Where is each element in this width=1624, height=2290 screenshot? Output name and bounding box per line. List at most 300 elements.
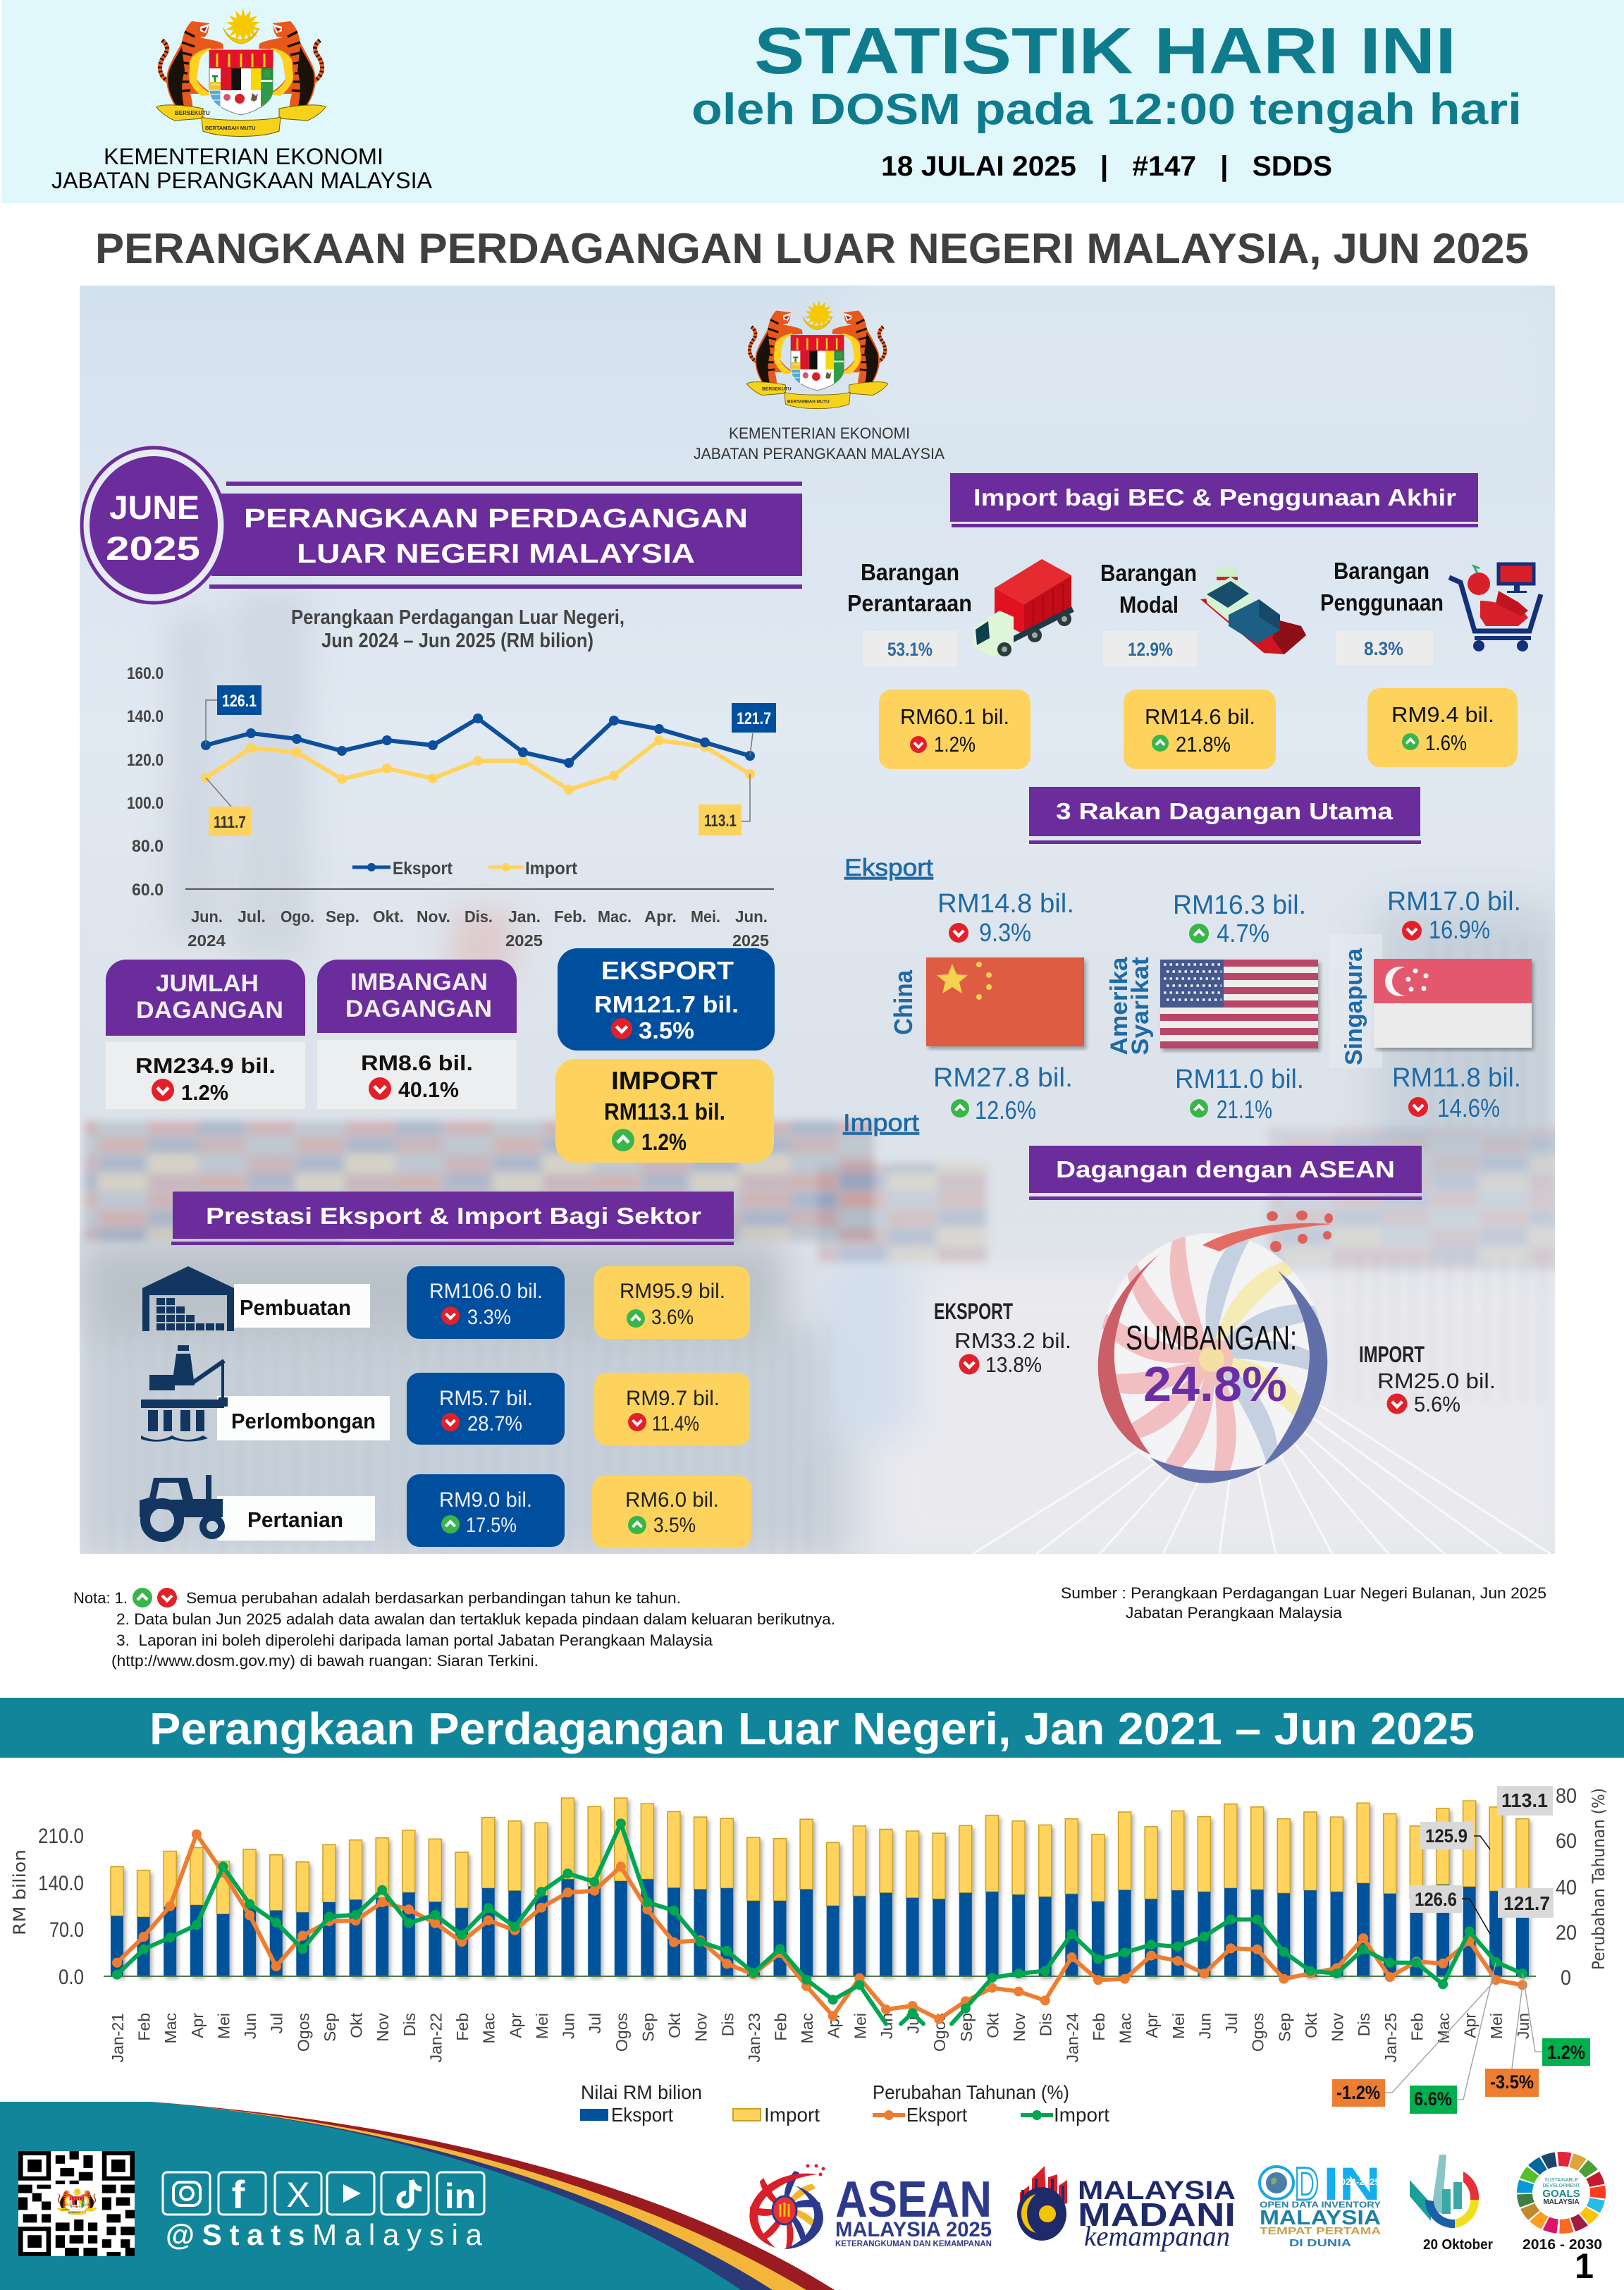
icon: tractor (140, 1475, 223, 1537)
x axis labels: Jan. (508, 907, 541, 926)
date line: 18 JULAI 2025 | #147 | SDDS (881, 151, 1332, 182)
panel: Imbangan Dagangan: 40.1% (398, 1077, 459, 1102)
legend: Import (1054, 2104, 1109, 2126)
y axis labels: 120.0 (127, 751, 164, 770)
x axis months: Jul (586, 2013, 604, 2033)
x axis months: Mac (480, 2013, 498, 2043)
USA flag (1160, 960, 1318, 1048)
share (1103, 631, 1198, 666)
USA import: 21.1% (1217, 1095, 1272, 1124)
emblem letters: IN (1323, 2157, 1381, 2210)
panel: Jumlah Dagangan (106, 960, 305, 1109)
page number: 1 (1575, 2246, 1594, 2286)
label (234, 1284, 370, 1328)
x axis months: Jul (268, 2013, 286, 2033)
China export: RM14.8 bil. (937, 889, 1074, 919)
icon: factory (142, 1266, 234, 1331)
y axis labels: 100.0 (127, 794, 164, 813)
wheel centre: SUSTAINABLE (1544, 2178, 1578, 2183)
wordmark: ASEAN (835, 2172, 992, 2228)
label: Barangan (1100, 560, 1197, 586)
callout: import May 2025: 125.9 (1425, 1825, 1468, 1847)
wordmark: MALAYSIA 2025 (835, 2218, 992, 2241)
panel: Imbangan Dagangan (317, 960, 517, 1109)
x axis labels: Mac. (598, 907, 632, 926)
emblem letters: D (1295, 2157, 1319, 2210)
wordmark (835, 2172, 992, 2248)
heading: June 2025 badge and banner (82, 448, 802, 603)
wordmark: MALAYSIA (1078, 2176, 1236, 2205)
emblem (1410, 2155, 1479, 2228)
panel: Jumlah Dagangan: JUMLAH (156, 970, 259, 997)
callout: import growth May (1410, 2086, 1457, 2114)
icon: tiktok (399, 2180, 422, 2206)
label: Penggunaan (1320, 589, 1444, 616)
ASEAN import: IMPORT (1359, 1342, 1425, 1367)
x axis months: Mei (851, 2013, 869, 2039)
callout: export Jun 2024: 126.1 (222, 692, 257, 711)
x axis months: Jan-24 (1063, 2013, 1081, 2062)
x axis months: Sep (1275, 2013, 1293, 2042)
x axis labels: Okt. (373, 907, 404, 926)
ASEAN share: SUMBANGAN: (1126, 1320, 1297, 1357)
China import (933, 1063, 1073, 1125)
x axis months: Nov (1010, 2013, 1028, 2042)
import value: 3.5% (653, 1514, 696, 1537)
icon: down legend (157, 1588, 177, 1608)
USA import: RM11.0 bil. (1175, 1065, 1304, 1094)
x axis months: Okt (665, 2012, 684, 2038)
x axis months: Dis (1355, 2013, 1373, 2036)
bars: export (111, 1879, 1529, 1976)
right axis (1556, 1784, 1608, 1990)
ministry label (694, 424, 945, 463)
ASEAN import: 5.6% (1414, 1392, 1460, 1416)
USA export: 4.7% (1217, 919, 1269, 948)
ministry label: JABATAN PERANGKAAN MALAYSIA (694, 445, 945, 463)
caption: DI DUNIA (1289, 2237, 1351, 2249)
import value: RM95.9 bil. (620, 1280, 725, 1303)
x axis months: Dis (1037, 2013, 1055, 2036)
panel: Import: 1.2% (641, 1129, 687, 1155)
value box: RM14.6 bil. (1145, 704, 1255, 729)
banner title (244, 504, 748, 569)
bars: import (111, 1798, 1529, 1917)
growth lines (117, 1823, 1522, 2024)
panel: Import (555, 1059, 774, 1163)
x axis labels: 2025 (505, 931, 543, 950)
logo: ODIN (1260, 2157, 1381, 2249)
USA label: Syarikat (1127, 957, 1154, 1055)
x axis months: Apr (506, 2013, 524, 2038)
icon: cargo ship (1200, 567, 1306, 654)
combo chart: monthly trade Jan 2021 - Jun 2025 (10, 1784, 1608, 2126)
emblem letters (1260, 2157, 1381, 2210)
leader lines (1462, 1836, 1490, 1934)
left axis (10, 1825, 84, 1989)
import value (592, 1476, 751, 1548)
callout: export Jun 2024 (217, 685, 262, 715)
import value: 3.6% (651, 1306, 694, 1329)
USA label (1106, 956, 1154, 1055)
x axis months: Jan-22 (426, 2013, 445, 2062)
row: Pembuatan (142, 1266, 750, 1339)
x axis months: Okt (1302, 2012, 1320, 2038)
x axis months: Ogos (613, 2013, 631, 2052)
caption: OPEN DATA INVENTORY (1260, 2200, 1381, 2210)
share (1336, 631, 1433, 665)
panel: Jumlah Dagangan: 1.2% (181, 1080, 228, 1105)
x axis months: Jun (560, 2013, 578, 2039)
x axis labels: Dis. (465, 907, 493, 926)
legend: Import (764, 2104, 820, 2126)
label (847, 559, 972, 616)
left axis: 0.0 (59, 1966, 84, 1989)
import value: RM9.7 bil. (626, 1387, 720, 1410)
notes: (http://www.dosm.gov.my) di bawah ruangan: Siaran Terkini. (111, 1652, 539, 1670)
panel: Eksport: EKSPORT (601, 956, 734, 985)
x axis months: Nov (692, 2013, 710, 2042)
export value (407, 1266, 565, 1339)
panel: Jumlah Dagangan: RM234.9 bil. (135, 1053, 276, 1078)
notes: 3. Laporan ini boleh diperolehi daripada laman portal Jabatan Perangkaan Malaysia (116, 1631, 713, 1649)
ministry name: KEMENTERIAN EKONOMI (104, 144, 383, 169)
x axis months: Mac (1116, 2013, 1135, 2043)
x axis labels: Jul. (238, 907, 266, 926)
x axis months: Ogos (1249, 2013, 1267, 2052)
x axis months: Feb (453, 2013, 472, 2041)
notes (73, 1588, 835, 1670)
x axis labels: Apr. (644, 907, 677, 926)
x axis labels: 2024 (187, 931, 226, 950)
left axis: 140.0 (38, 1872, 84, 1895)
icon: linkedin: in (445, 2176, 476, 2216)
panel: Import: IMPORT (611, 1066, 718, 1095)
label (1100, 560, 1197, 618)
x axis months: Apr (1143, 2013, 1161, 2038)
row: Perlombongan (141, 1345, 750, 1445)
x axis months: Mei (1487, 2013, 1506, 2039)
years caption: 2016 - 2030 (1522, 2237, 1602, 2253)
callout: import Jun 2024 (209, 807, 251, 836)
right axis: 0 (1561, 1966, 1571, 1990)
logo: SDG Malaysia (1510, 2145, 1613, 2253)
logo: ASEAN Malaysia 2025 (749, 2165, 991, 2249)
left axis: 70.0 (49, 1918, 84, 1942)
callout: import May 2025 (1420, 1822, 1474, 1849)
Singapore label backing and text (1329, 934, 1382, 1068)
callout: export Jun 2025: 121.7 (1503, 1892, 1550, 1914)
China export (937, 889, 1074, 947)
share: 8.3% (1364, 638, 1403, 659)
icon: up legend (133, 1588, 152, 1608)
Singapore import: RM11.8 bil. (1392, 1063, 1521, 1093)
caption (1260, 2200, 1381, 2249)
USA import (1175, 1065, 1304, 1124)
chart title: Perangkaan Perdagangan Luar Negeri, (291, 606, 625, 629)
label (217, 1396, 390, 1440)
value box: RM60.1 bil. (900, 704, 1009, 729)
right axis: 60 (1556, 1830, 1577, 1853)
callout: import Jun 2025 (699, 804, 742, 835)
x axis labels: Ogo. (281, 907, 314, 926)
ministry name: JABATAN PERANGKAAN MALAYSIA (51, 168, 433, 193)
x axis months: Feb (1090, 2013, 1108, 2041)
x axis months: Feb (1408, 2013, 1426, 2041)
panel: infographic background (80, 286, 1558, 1558)
export value: RM5.7 bil. (439, 1387, 533, 1410)
source: Jabatan Perangkaan Malaysia (1126, 1604, 1342, 1622)
share (863, 631, 957, 666)
panel: Imbangan Dagangan: DAGANGAN (345, 996, 492, 1022)
callout: import Jun 2025: 113.1 (1501, 1789, 1548, 1811)
callout: import growth May: 6.6% (1414, 2088, 1452, 2110)
heading: Import bagi BEC (950, 473, 1478, 527)
legend (352, 859, 578, 878)
source (1061, 1584, 1546, 1622)
x axis months: Jun (241, 2013, 259, 2039)
wheel centre: GOALS (1542, 2188, 1580, 2200)
Singapore label backing and text: Singapura (1341, 948, 1367, 1065)
import value (594, 1266, 750, 1339)
legend: Eksport (906, 2104, 967, 2126)
chart title: Jun 2024 – Jun 2025 (RM bilion) (321, 630, 593, 652)
callout: export growth Jun: -3.5% (1490, 2071, 1534, 2093)
label: Barangan (1334, 558, 1429, 584)
x axis months: Apr (188, 2013, 207, 2038)
Singapore export: RM17.0 bil. (1387, 887, 1521, 917)
ASEAN import: RM25.0 bil. (1377, 1369, 1496, 1393)
heading: Prestasi Eksport & Import Bagi Sektor (171, 1192, 734, 1245)
banner title: LUAR NEGERI MALAYSIA (297, 539, 695, 569)
export value: 28.7% (467, 1412, 522, 1435)
callout: export May 2025: 126.6 (1415, 1889, 1457, 1910)
legend (580, 2081, 1109, 2126)
social handle: @Stats Malaysia (166, 2218, 483, 2251)
label: Pembuatan (240, 1295, 351, 1320)
section band: long-run chart title: Perangkaan Perdagangan Luar Negeri, Jan 2021 – Jun 2025 (149, 1703, 1475, 1754)
x axis months: Jan-25 (1382, 2013, 1400, 2062)
callout: export growth Jun (1485, 2069, 1539, 2097)
heading: Prestasi Eksport & Import Bagi Sektor: Prestasi Eksport & Import Bagi Sektor (206, 1203, 701, 1229)
export value: RM106.0 bil. (429, 1280, 543, 1303)
x axis labels: Nov. (417, 907, 450, 926)
logo: Hari Statistik Negara (1410, 2155, 1493, 2253)
x axis months: Jul (904, 2013, 923, 2033)
BEC: Barangan Perantaraan (847, 559, 1073, 769)
China import: 12.6% (975, 1096, 1036, 1125)
swirl (749, 2165, 825, 2249)
icon: facebook: f (232, 2172, 245, 2217)
notes: Nota: 1. (73, 1589, 128, 1607)
BEC: Barangan Modal (1100, 560, 1306, 769)
y axis labels (127, 664, 164, 900)
x axis months: Jan-21 (109, 2013, 127, 2062)
legend: Nilai RM bilion (581, 2081, 702, 2103)
export value: 3.3% (467, 1306, 511, 1329)
wordmark (1078, 2176, 1236, 2252)
x axis months: Jun (1514, 2013, 1532, 2039)
value box (1124, 690, 1276, 769)
legend: Eksport (393, 859, 453, 878)
callout: import Jun 2025: 113.1 (704, 812, 737, 831)
x axis months: Jun (1195, 2013, 1214, 2039)
panel: Imbangan Dagangan: RM8.6 bil. (361, 1051, 473, 1075)
Singapore export: 16.9% (1429, 915, 1490, 944)
stacked bars (111, 1798, 1529, 1976)
label (1320, 558, 1444, 616)
x axis labels: Feb. (554, 907, 586, 926)
value box: 1.2% (934, 732, 976, 757)
x axis labels (187, 907, 769, 950)
x axis months: Mei (1169, 2013, 1188, 2039)
ASEAN export: RM33.2 bil. (954, 1328, 1071, 1353)
row: Pertanian (140, 1474, 751, 1548)
y axis labels: 140.0 (127, 707, 164, 726)
x axis months: Ogos (294, 2013, 312, 2052)
chart title (291, 606, 625, 652)
y axis labels: 80.0 (132, 837, 164, 856)
x axis months: Nov (374, 2013, 392, 2042)
China export: 9.3% (979, 918, 1031, 947)
icon: ASEAN swirl (1098, 1211, 1333, 1483)
x axis months: Apr (825, 2013, 843, 2038)
callout: export growth May: -1.2% (1336, 2082, 1380, 2103)
main title: PERANGKAAN PERDAGANGAN LUAR NEGERI MALAYSIA, JUN 2025 (95, 225, 1529, 272)
label: Eksport: Eksport (844, 855, 934, 881)
x axis months: Jan-23 (745, 2013, 763, 2062)
callout: import growth Jun (1542, 2038, 1590, 2066)
USA label: Amerika (1106, 956, 1133, 1055)
x axis months: Mac (161, 2013, 180, 2043)
callout: import Jun 2024: 111.7 (214, 813, 246, 832)
export value (407, 1373, 565, 1445)
ASEAN export: EKSPORT (934, 1299, 1013, 1324)
notes: 2. Data bulan Jun 2025 adalah data awalan dan tertakluk kepada pindaan dalam keluaran berikutnya. (116, 1610, 835, 1628)
social icons (163, 2172, 484, 2217)
callout: export Jun 2025: 121.7 (737, 709, 771, 728)
value box (1367, 688, 1518, 767)
source: Sumber : Perangkaan Perdagangan Luar Negeri Bulanan, Jun 2025 (1061, 1584, 1546, 1602)
ASEAN import (1359, 1342, 1496, 1416)
ministry label: KEMENTERIAN EKONOMI (729, 424, 910, 442)
subtitle: oleh DOSM pada 12:00 tengah hari (691, 85, 1522, 134)
icon: crest in QR (55, 2184, 99, 2219)
heading: Dagangan dengan ASEAN: Dagangan dengan ASEAN (1056, 1156, 1395, 1182)
emblem letters: 2024-2025 (1335, 2176, 1380, 2187)
left axis: 210.0 (38, 1825, 84, 1848)
panel: Eksport: RM121.7 bil. (594, 991, 739, 1017)
x axis months: Dis (718, 2013, 737, 2036)
x axis months: Mei (214, 2013, 233, 2039)
value box: 21.8% (1176, 732, 1231, 757)
y axis labels: 160.0 (127, 664, 164, 683)
right axis: Perubahan Tahunan (%) (1589, 1788, 1608, 1970)
y axis labels: 60.0 (132, 881, 164, 900)
x axis months: Feb (135, 2013, 154, 2041)
wordmark: kemampanan (1084, 2220, 1230, 2252)
QR code (18, 2151, 135, 2256)
icon: down (611, 1018, 632, 1039)
share: 12.9% (1128, 639, 1173, 660)
caption: TEMPAT PERTAMA (1260, 2225, 1381, 2237)
legend: Import (525, 859, 578, 878)
x axis months: Sep (957, 2013, 976, 2042)
x axis labels: Jun. (735, 907, 768, 926)
crest and ministry in panel (694, 300, 945, 463)
x axis months: Dis (400, 2013, 419, 2036)
wheel centre: DEVELOPMENT (1543, 2184, 1580, 2188)
export line (201, 714, 755, 768)
icon: down (369, 1077, 391, 1100)
export value (407, 1474, 565, 1547)
logo: Malaysia Madani (1017, 2166, 1236, 2252)
ministry name (51, 144, 433, 193)
Singapore flag (1374, 959, 1532, 1048)
right axis: 20 (1556, 1921, 1577, 1945)
x axis labels: 2025 (732, 931, 769, 950)
notes: Semua perubahan adalah berdasarkan perbandingan tahun ke tahun. (186, 1589, 681, 1607)
section band: long-run chart title (0, 1698, 1624, 1758)
title: Statistik Hari Ini: STATISTIK HARI INI (754, 14, 1456, 87)
x axis labels: Sep. (326, 907, 359, 926)
Singapore export (1387, 887, 1521, 944)
line chart: trade Jun 2024 - Jun 2025 (127, 606, 776, 950)
export value: 17.5% (466, 1514, 517, 1537)
icon: Malaysian coat of arms (156, 8, 326, 137)
label (217, 1496, 375, 1541)
icon: down (152, 1079, 174, 1101)
label: Barangan (861, 559, 959, 585)
icon: truck (973, 559, 1073, 657)
x axis months: Sep (321, 2013, 339, 2042)
footer shape (0, 2102, 835, 2290)
banner title: PERANGKAAN PERDAGANGAN (244, 504, 748, 534)
value box: RM9.4 bil. (1391, 702, 1494, 727)
Singapore import: 14.6% (1437, 1094, 1500, 1122)
right axis: 40 (1556, 1876, 1577, 1899)
x axis months: Apr (1461, 2013, 1480, 2038)
ASEAN export: 13.8% (985, 1352, 1042, 1377)
x axis months: Jul (1222, 2013, 1241, 2033)
panel: Eksport (558, 948, 775, 1051)
panel: Imbangan Dagangan: IMBANGAN (350, 969, 488, 996)
x axis months: Ogos (930, 2013, 949, 2052)
China label: China (889, 969, 918, 1035)
value box: 1.6% (1425, 730, 1467, 755)
Singapore import (1392, 1063, 1521, 1122)
wheel centre (1542, 2178, 1580, 2206)
x axis months: Mac (798, 2013, 816, 2043)
label: Import: Import (843, 1110, 920, 1137)
legend: Eksport (611, 2104, 673, 2126)
markers: import growth (117, 1823, 1522, 2013)
callout: export Jun 2025 (1498, 1888, 1554, 1918)
ASEAN export (934, 1299, 1071, 1377)
callout: export Jun 2025 (732, 703, 776, 733)
China flag (926, 957, 1084, 1046)
icon: up (612, 1129, 634, 1151)
value box (879, 690, 1031, 769)
caption: MALAYSIA (1260, 2207, 1381, 2229)
USA export: RM16.3 bil. (1173, 890, 1306, 920)
ASEAN share: 24.8% (1143, 1357, 1287, 1412)
wheel (1510, 2145, 1613, 2241)
x axis labels: Jun. (191, 907, 223, 926)
heading: Import bagi BEC: Import bagi BEC & Penggunaan Akhir (973, 484, 1456, 510)
left axis: RM bilion (10, 1849, 30, 1935)
legend: Perubahan Tahunan (%) (873, 2081, 1069, 2103)
